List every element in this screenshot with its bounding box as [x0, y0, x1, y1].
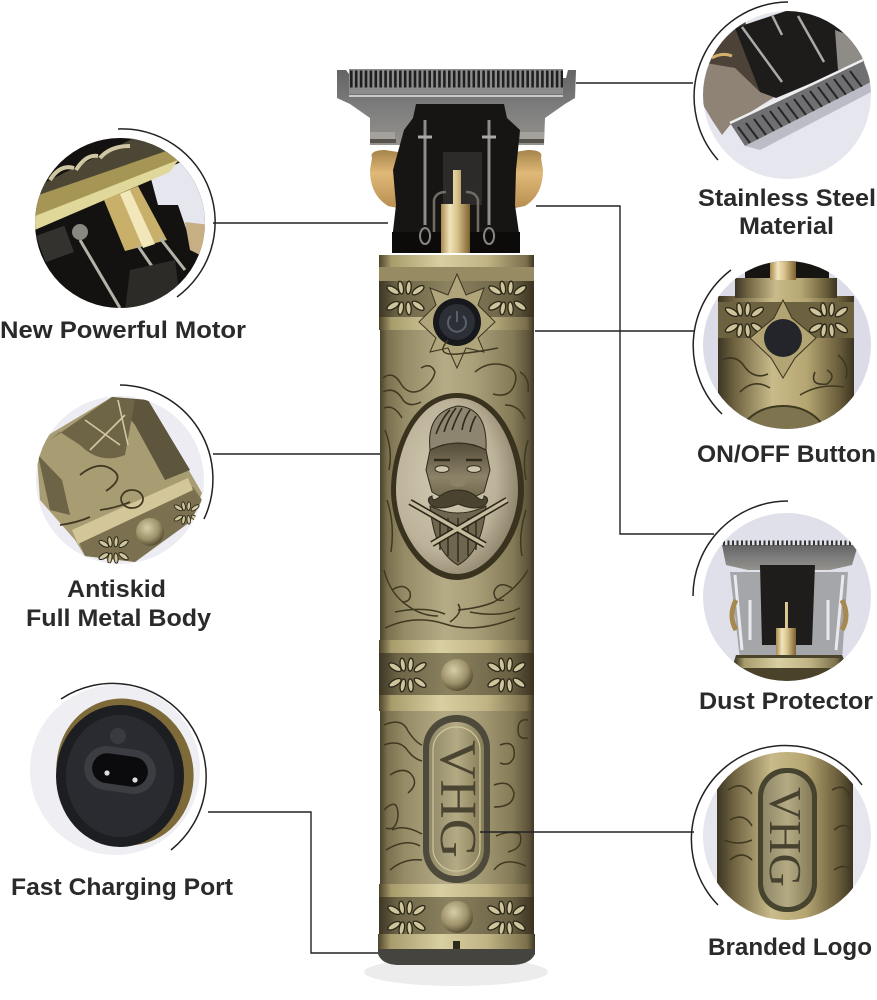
arc: [693, 501, 788, 596]
arc: [120, 385, 213, 519]
icon: charging puck: [37, 681, 213, 863]
middle band: [379, 640, 534, 653]
gold side caps: [370, 150, 398, 208]
photo: motor close-up: [30, 135, 210, 310]
VHG logo pill: [423, 715, 490, 883]
blade teeth: [349, 69, 563, 94]
arc: [61, 683, 206, 850]
panel: stainless steel material: [694, 2, 876, 212]
gold motor pin: [441, 170, 470, 253]
black housing: [392, 104, 520, 253]
arc: [693, 270, 731, 414]
label: Dust Protector: [699, 688, 873, 715]
base cap: [378, 949, 535, 965]
steel blade: [337, 70, 576, 145]
crossed razors: [410, 500, 507, 545]
panel: on/off button: [693, 258, 876, 474]
bottom band: [379, 884, 534, 898]
logo connector line: [480, 831, 694, 833]
photo: blade close-up: [700, 8, 875, 183]
panel: branded logo: [691, 745, 875, 961]
face: [426, 443, 490, 500]
connector lines: [208, 83, 714, 953]
trimmer body: [378, 255, 535, 965]
photo: dust guard: [703, 513, 871, 681]
label: Branded Logo: [708, 934, 872, 961]
logo text: VHG: [760, 787, 811, 887]
trimmer product: [337, 69, 576, 986]
label: Antiskid: [67, 576, 166, 603]
label: Stainless Steel: [698, 185, 876, 212]
arc: [691, 745, 862, 905]
panel: new powerful motor: [0, 129, 246, 344]
spring wires: [425, 120, 489, 225]
label: ON/OFF Button: [697, 441, 876, 468]
panel: fast charging port: [11, 681, 233, 901]
photo: textured metal body: [33, 393, 208, 568]
arc: [694, 2, 788, 160]
floor shadow: [364, 958, 548, 986]
trimmer head: [337, 69, 576, 253]
logo text: VHG: [429, 740, 486, 858]
label: New Powerful Motor: [0, 317, 246, 344]
label: full metal body: Full Metal Body: [26, 605, 212, 632]
sun motif and power button: [419, 274, 495, 368]
cloud engravings lower: [384, 720, 528, 870]
photo backdrop: [30, 685, 200, 855]
moustache and beard: [428, 490, 488, 508]
label: Fast Charging Port: [11, 874, 233, 901]
cloud engravings upper: [383, 340, 528, 628]
panel: antiskid full metal body: [33, 385, 213, 603]
barber medallion: [391, 393, 524, 580]
arc: [118, 129, 215, 297]
hair: [430, 406, 486, 450]
label: material: Material: [739, 213, 834, 240]
panel: dust protector: [693, 501, 875, 715]
photo: logo close-up: [703, 752, 871, 920]
photo: power button close-up: [703, 261, 871, 429]
top collar: [379, 255, 534, 267]
